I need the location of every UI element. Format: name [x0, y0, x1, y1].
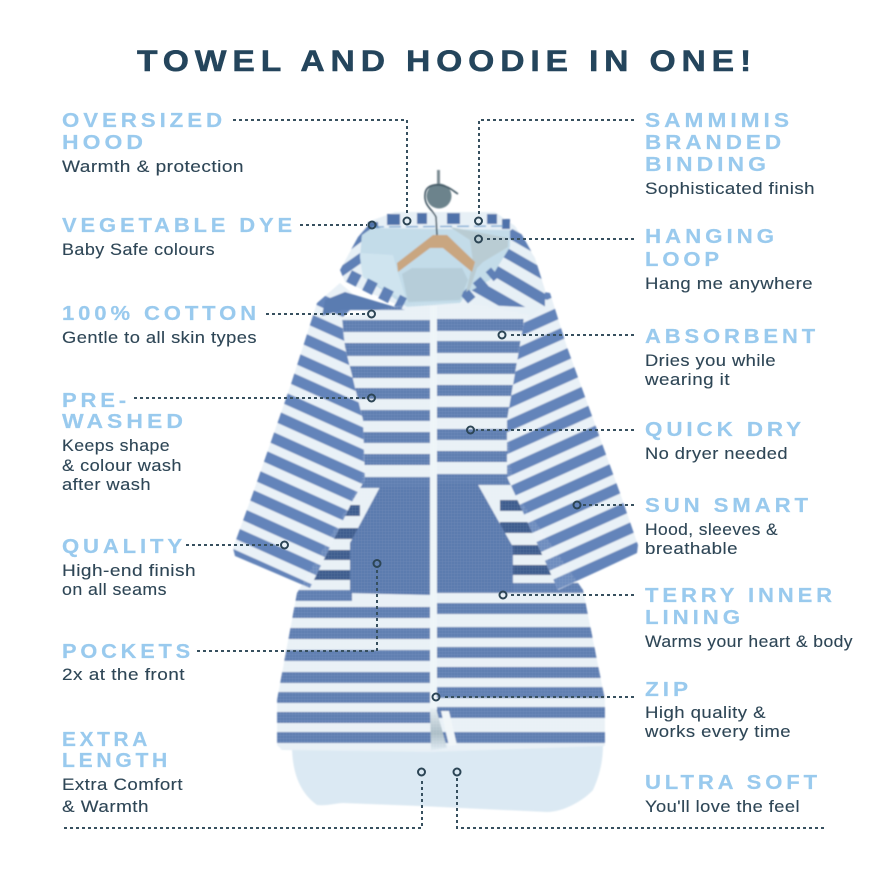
- callout: absorbent: [498, 325, 819, 389]
- callout: absorbent: wearing it: [644, 371, 730, 389]
- callout: zip: works every time: [644, 723, 791, 741]
- callout: extra length: Extra Comfort: [62, 776, 183, 794]
- callout: sun smart: [574, 494, 812, 558]
- callout: sun smart: SUN SMART: [645, 494, 812, 517]
- callout: sun smart: breathable: [645, 540, 738, 558]
- terry lining at hem: [292, 745, 603, 812]
- callout: ultra soft: ULTRA SOFT: [645, 771, 821, 794]
- callout: absorbent: Dries you while: [645, 352, 776, 370]
- hanger hook knob: [426, 184, 452, 208]
- wooden hanger: [397, 235, 475, 272]
- hood: right panel stripes: [472, 228, 546, 308]
- brand tag: [441, 711, 457, 746]
- callout: pre-washed: after wash: [62, 476, 151, 494]
- callout: extra length: [62, 728, 425, 828]
- shoulder band left: [322, 292, 405, 316]
- callout: zip: High quality &: [645, 704, 766, 722]
- callout: 100% cotton: 100% COTTON: [62, 302, 260, 325]
- callout: sammimis branded binding: BRANDED: [645, 131, 785, 154]
- callout: pre-washed: PRE-: [62, 389, 130, 412]
- right pocket: [436, 483, 513, 593]
- callout: pre-washed: Keeps shape: [62, 437, 170, 455]
- callout: oversized hood: [62, 109, 410, 224]
- hanger hook wire: [425, 185, 458, 235]
- callout: sammimis branded binding: SAMMIMIS: [645, 109, 793, 132]
- hood: lining back of neck: [402, 268, 468, 302]
- callout: zip: [432, 678, 791, 741]
- callout: quality: [62, 535, 288, 599]
- shoulder band right: [462, 296, 548, 318]
- callout: terry inner lining: LINING: [645, 606, 744, 629]
- callout: extra length: EXTRA: [62, 728, 151, 751]
- hood: grey fold right: [450, 227, 508, 292]
- callout: vegetable dye: Baby Safe colours: [62, 241, 215, 259]
- callout: oversized hood: HOOD: [62, 131, 147, 154]
- zip: [430, 306, 437, 710]
- hood: outer shell: [340, 212, 545, 308]
- stripes under the sleeves: [300, 500, 570, 580]
- callout: ultra soft: You'll love the feel: [645, 798, 800, 816]
- callout: sammimis branded binding: Sophisticated finish: [645, 180, 815, 198]
- hood: binding stitch line: [372, 226, 506, 227]
- hood: terry interior: [360, 228, 510, 307]
- callout: hanging loop: [475, 225, 813, 293]
- callout: quick dry: No dryer needed: [645, 445, 788, 463]
- callout: quality: on all seams: [62, 581, 167, 599]
- callout: hanging loop: Hang me anywhere: [645, 275, 813, 293]
- callout: 100% cotton: [62, 302, 375, 347]
- callout: zip: ZIP: [645, 678, 692, 701]
- right sleeve: [506, 291, 639, 591]
- hood: right collar edge: [464, 272, 495, 299]
- callout: sammimis branded binding: [475, 109, 815, 224]
- hood: lighter left fold: [360, 253, 407, 302]
- callout: oversized hood: OVERSIZED: [62, 109, 226, 132]
- weave overlay: [276, 305, 606, 742]
- callout: quick dry: QUICK DRY: [645, 418, 805, 441]
- callout: quick dry: [467, 418, 805, 463]
- title: TOWEL AND HOODIE IN ONE!: [137, 45, 757, 78]
- hood: left panel stripes: [335, 222, 380, 276]
- callout: absorbent: ABSORBENT: [645, 325, 819, 348]
- hanger hook pin: [437, 170, 440, 186]
- callout: pre-washed: [62, 389, 375, 494]
- callout: extra length: & Warmth: [62, 798, 149, 816]
- hood: binding blocks: [368, 213, 510, 231]
- garment body: [270, 295, 615, 755]
- callout: sun smart: Hood, sleeves &: [645, 521, 778, 539]
- callout: extra length: LENGTH: [62, 749, 171, 772]
- callout: vegetable dye: VEGETABLE DYE: [62, 214, 296, 237]
- callout: 100% cotton: Gentle to all skin types: [62, 329, 257, 347]
- callout: sammimis branded binding: BINDING: [645, 153, 770, 176]
- callout: terry inner lining: TERRY INNER: [645, 584, 836, 607]
- callout: ultra soft: [454, 768, 824, 828]
- illustration: hooded towel on a hanger: [220, 170, 650, 812]
- callout: pockets: POCKETS: [62, 640, 194, 663]
- callout: terry inner lining: Warms your heart & body: [645, 633, 853, 651]
- callout: pockets: 2x at the front: [62, 666, 185, 684]
- callout: hanging loop: LOOP: [645, 248, 723, 271]
- callout: quality: High-end finish: [62, 562, 196, 580]
- callout: pre-washed: & colour wash: [62, 457, 182, 475]
- callout: terry inner lining: [500, 584, 853, 651]
- zip slit: [430, 708, 447, 750]
- callout: hanging loop: HANGING: [645, 225, 778, 248]
- hood: left collar edge: [349, 276, 404, 304]
- callout: pre-washed: WASHED: [62, 410, 187, 433]
- callout: vegetable dye: [62, 214, 376, 259]
- callout: oversized hood: Warmth & protection: [62, 158, 244, 176]
- callout: quality: QUALITY: [62, 535, 186, 558]
- callout: pockets: [62, 560, 380, 684]
- left pocket: [350, 487, 431, 595]
- left sleeve: [232, 284, 366, 588]
